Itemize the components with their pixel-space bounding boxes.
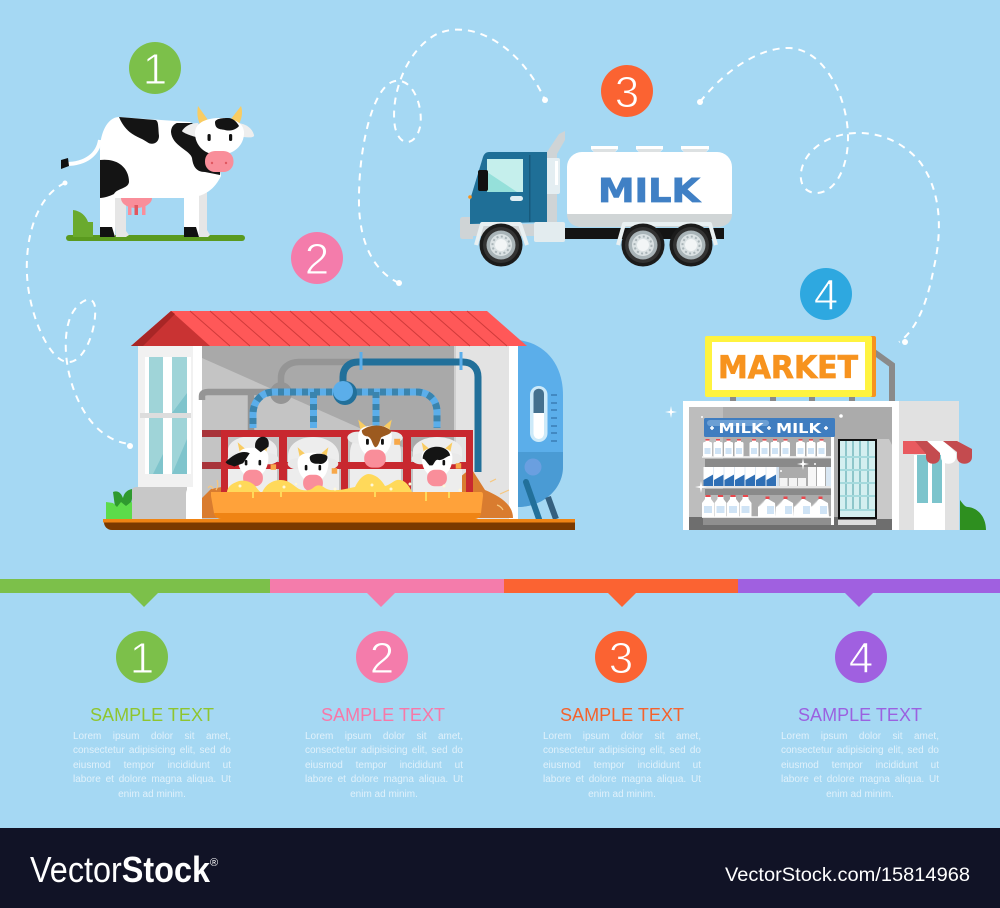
plants — [106, 489, 138, 519]
step 1 heading: SAMPLE TEXT — [90, 705, 214, 725]
illustration: cow — [61, 106, 254, 241]
pipe hub — [333, 381, 357, 405]
step 3 body text: enim ad minim. — [588, 789, 656, 800]
milk banner: MILK — [776, 422, 822, 437]
step 2 body text: enim ad minim. — [350, 789, 418, 800]
fridge — [838, 439, 877, 525]
shelves — [702, 437, 834, 525]
dashed route: barn to truck — [359, 30, 548, 286]
step 1 body text: eiusmod tempor incididunt ut — [73, 760, 231, 771]
step 2 body text — [305, 731, 463, 800]
hay heaps — [202, 468, 513, 518]
step 3 body text: labore et dolore magna aliqua. Ut — [543, 774, 701, 785]
step 1 body text: consectetur adipisicing elit, sed do — [73, 745, 231, 756]
step 1 body text: Lorem ipsum dolor sit amet, — [73, 731, 231, 742]
side door — [914, 455, 945, 530]
step 4 body text: labore et dolore magna aliqua. Ut — [781, 774, 939, 785]
tail — [61, 140, 100, 169]
step 3 body text — [543, 731, 701, 800]
bush — [960, 500, 986, 530]
cab — [468, 152, 547, 224]
badge 3 top — [601, 65, 653, 117]
step 4 body text: Lorem ipsum dolor sit amet, — [781, 731, 939, 742]
calf 3 — [347, 420, 403, 468]
step 4 heading: SAMPLE TEXT — [798, 705, 922, 725]
feed heap — [227, 474, 462, 493]
window — [140, 357, 191, 474]
striped milk lines — [253, 392, 437, 428]
tank gauge — [530, 386, 557, 442]
step 2 body text: Lorem ipsum dolor sit amet, — [305, 731, 463, 742]
step 3 body text: eiusmod tempor incididunt ut — [543, 760, 701, 771]
step 4 badge — [835, 631, 887, 683]
badge 1 top — [129, 42, 181, 94]
grey pipes — [202, 362, 454, 430]
step 1 badge: 1 — [130, 634, 154, 683]
front leg — [184, 195, 199, 237]
footer id: VectorStock.com/15814968 — [725, 865, 970, 886]
tank — [567, 146, 732, 227]
step 4 body text — [781, 731, 939, 800]
fence — [202, 430, 473, 492]
footer logo: VectorStock — [30, 849, 211, 890]
illustration: market — [665, 336, 986, 530]
step 3 body text: Lorem ipsum dolor sit amet, — [543, 731, 701, 742]
calf 4 — [412, 442, 462, 486]
registered mark: ® — [210, 857, 218, 869]
exhaust — [544, 131, 565, 222]
sparkles — [665, 406, 843, 493]
cow backs — [228, 430, 462, 492]
step 2 body text: consectetur adipisicing elit, sed do — [305, 745, 463, 756]
far legs — [112, 185, 210, 237]
step 2 body text: eiusmod tempor incididunt ut — [305, 760, 463, 771]
step 4 body text: enim ad minim. — [826, 789, 894, 800]
head — [182, 106, 254, 172]
badge 1 top: 1 — [143, 45, 167, 94]
milk banner — [704, 418, 835, 437]
chassis — [460, 217, 724, 239]
blue supply pipe — [343, 352, 478, 472]
udder — [121, 198, 152, 215]
step 3 badge — [595, 631, 647, 683]
badge 4 top: 4 — [814, 271, 838, 320]
footer band — [0, 828, 1000, 908]
step 1 body text — [73, 731, 231, 800]
platform — [103, 519, 575, 530]
body — [100, 117, 221, 237]
dashed route: truck to market — [697, 48, 939, 345]
step 1 badge — [116, 631, 168, 683]
badge 4 top — [800, 268, 852, 320]
milk banner: MILK — [718, 422, 765, 437]
top row bottles — [703, 439, 826, 457]
fenders — [476, 224, 716, 245]
sign post — [874, 352, 892, 402]
step box — [534, 222, 565, 242]
hooves — [100, 227, 199, 237]
step 3 badge: 3 — [609, 634, 633, 683]
calves — [226, 420, 462, 491]
step 1 body text: enim ad minim. — [118, 789, 186, 800]
step 2 badge: 2 — [370, 634, 394, 683]
tank label: MILK — [598, 171, 702, 210]
illustration: milk tanker truck — [460, 65, 732, 266]
wheels — [480, 224, 712, 266]
step 2 body text: labore et dolore magna aliqua. Ut — [305, 774, 463, 785]
step 4 badge: 4 — [849, 634, 873, 683]
building — [683, 401, 959, 530]
step 2 heading: SAMPLE TEXT — [321, 705, 445, 725]
calf 2 — [288, 447, 338, 491]
calf 1 — [226, 437, 278, 486]
market sign: MARKET — [718, 350, 858, 386]
dashed route: cow to barn — [27, 180, 133, 449]
ground and grass — [66, 210, 245, 241]
badge 3 top: 3 — [615, 68, 639, 117]
bottom row bottles and jugs — [702, 495, 829, 517]
step 3 heading: SAMPLE TEXT — [560, 705, 684, 725]
step 4 body text: eiusmod tempor incididunt ut — [781, 760, 939, 771]
market sign — [705, 336, 876, 397]
tank — [518, 340, 563, 519]
trough — [211, 492, 483, 519]
cartons — [704, 467, 831, 486]
barn interior — [202, 346, 518, 519]
step 2 badge — [356, 631, 408, 683]
awning — [903, 441, 972, 464]
timeline bar — [0, 579, 1000, 607]
badge 2 top: 2 — [305, 235, 329, 284]
left white building — [132, 346, 202, 519]
badge 2 top — [291, 232, 343, 284]
black spots — [100, 117, 222, 198]
step 4 body text: consectetur adipisicing elit, sed do — [781, 745, 939, 756]
step 3 body text: consectetur adipisicing elit, sed do — [543, 745, 701, 756]
step 1 body text: labore et dolore magna aliqua. Ut — [73, 774, 231, 785]
roof — [131, 311, 527, 346]
illustration: milking barn — [103, 311, 575, 530]
